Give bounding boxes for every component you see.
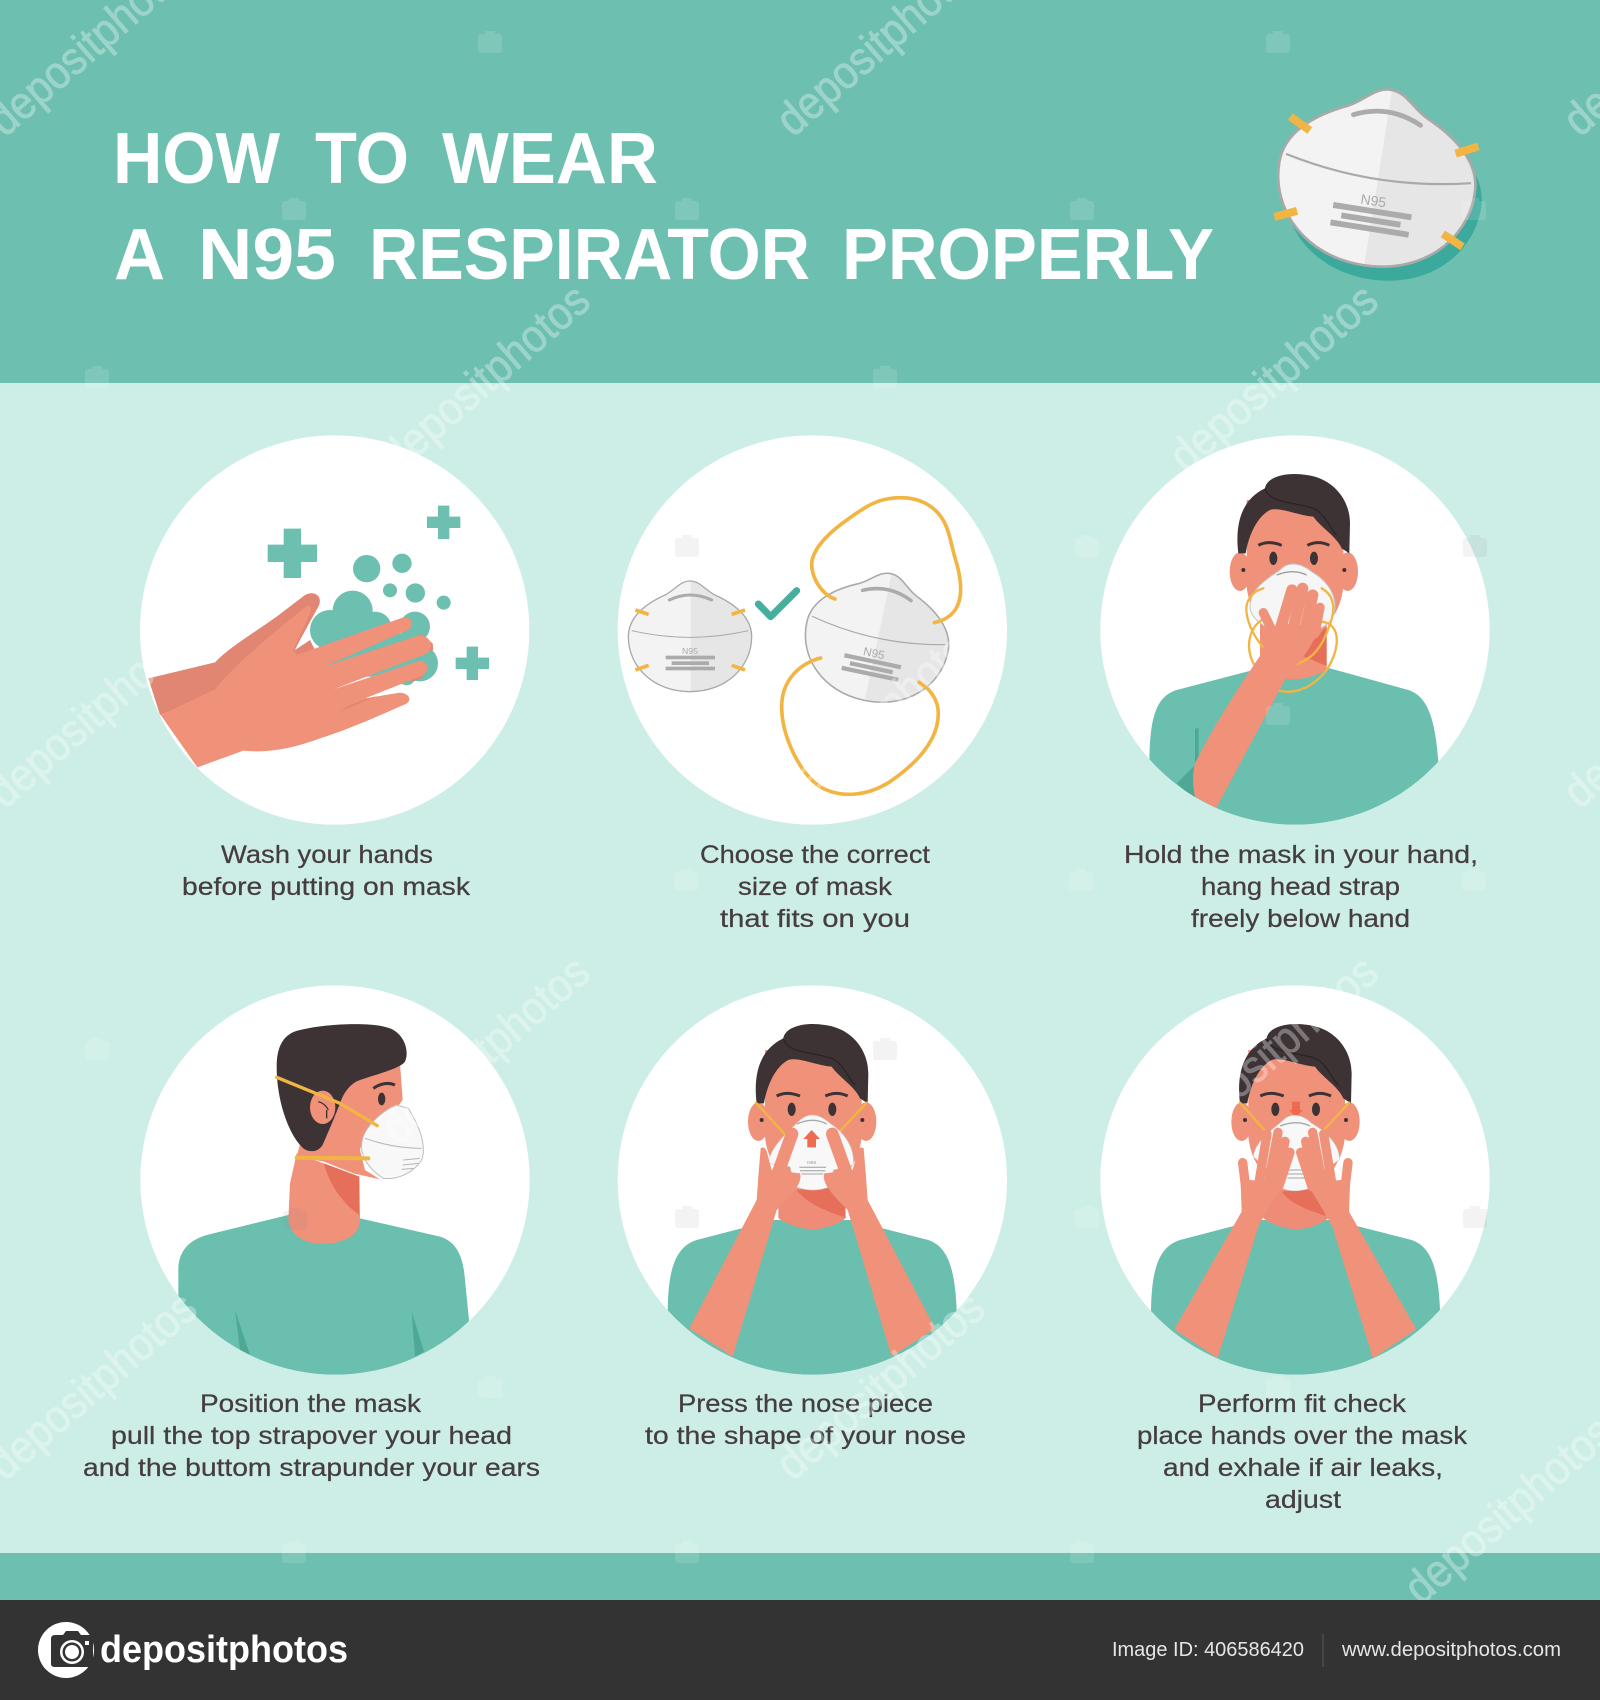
caption: step 6: Perform fit check	[1198, 1390, 1407, 1418]
footer image id: Image ID: 406586420	[1112, 1639, 1304, 1661]
title: N95	[198, 215, 336, 295]
panel: step 3 hold the mask	[1100, 435, 1490, 853]
footer logo wordmark: depositphotos	[100, 1629, 348, 1671]
title	[113, 119, 1214, 295]
footer bar	[0, 1600, 1600, 1700]
bottom band	[0, 1553, 1600, 1600]
panel: step 4 position the mask	[140, 985, 530, 1403]
caption: step 4	[83, 1390, 540, 1482]
title: TO	[315, 119, 409, 199]
caption: step 6: place hands over the mask	[1137, 1422, 1468, 1450]
caption: step 3: hang head strap	[1201, 873, 1400, 901]
watermarks: depositphotos	[1158, 273, 1387, 482]
caption: step 3: freely below hand	[1191, 905, 1410, 933]
caption: step 2: Choose the correct	[700, 841, 930, 869]
man in profile with mask	[178, 1024, 469, 1403]
man pressing nose piece	[668, 1024, 957, 1403]
hand washing	[148, 593, 433, 767]
icon: soap bubbles	[310, 554, 451, 685]
icon: header N95 mask	[1263, 74, 1497, 295]
caption: step 2	[700, 841, 930, 933]
caption: step 6	[1137, 1390, 1468, 1514]
caption: step 1	[182, 841, 471, 901]
man holding mask	[1149, 474, 1438, 853]
caption: step 1: Wash your hands	[221, 841, 433, 869]
caption: step 5: Press the nose piece	[678, 1390, 933, 1418]
caption: step 2: size of mask	[738, 873, 893, 901]
watermark camera icons on coloured background	[85, 31, 1486, 1563]
caption: step 4: Position the mask	[200, 1390, 422, 1418]
caption: step 3: Hold the mask in your hand,	[1124, 841, 1478, 869]
title: PROPERLY	[842, 215, 1214, 295]
caption: step 6: and exhale if air leaks,	[1163, 1454, 1443, 1482]
watermarks: depositphotos	[1158, 945, 1387, 1154]
icon: small mask	[628, 581, 752, 692]
icon: plus signs	[268, 506, 489, 680]
caption: step 4: and the buttom strapunder your ears	[83, 1454, 540, 1482]
title: WEAR	[442, 119, 658, 199]
icon: header N95 mask: N95	[1360, 191, 1388, 210]
watermark camera icons on white circles	[283, 535, 1487, 1230]
header band	[0, 0, 1600, 383]
caption: step 1: before putting on mask	[182, 873, 471, 901]
caption: step 5	[645, 1390, 966, 1450]
title: A	[114, 215, 165, 295]
caption: step 3	[1124, 841, 1478, 933]
title: RESPIRATOR	[369, 215, 810, 295]
footer website: www.depositphotos.com	[1341, 1639, 1561, 1661]
watermarks: depositphotos	[370, 945, 599, 1154]
watermarks: depositphotos	[765, 609, 994, 818]
icon: small mask: N95	[682, 646, 698, 656]
caption: step 5: to the shape of your nose	[645, 1422, 966, 1450]
icon: large mask with straps	[782, 498, 961, 794]
icon: check mark	[758, 591, 797, 617]
caption: step 6: adjust	[1265, 1486, 1341, 1514]
man pressing nose piece: N95	[807, 1160, 816, 1166]
panel: step 6 fit check	[1100, 985, 1490, 1403]
panel: step 5 press the nose piece	[618, 985, 1007, 1403]
title: HOW	[113, 119, 280, 199]
icon: large mask with straps: N95	[862, 645, 886, 662]
panel: step 2 choose mask	[618, 435, 1007, 825]
icon: footer logo camera	[38, 1622, 94, 1678]
watermarks: depositphotos	[765, 1281, 994, 1490]
man performing fit check	[1151, 1024, 1440, 1403]
caption: step 2: that fits on you	[720, 905, 910, 933]
caption: step 4: pull the top strapover your head	[111, 1422, 512, 1450]
panel: step 1 wash hands	[140, 435, 529, 825]
watermarks: depositphotos	[370, 273, 599, 482]
